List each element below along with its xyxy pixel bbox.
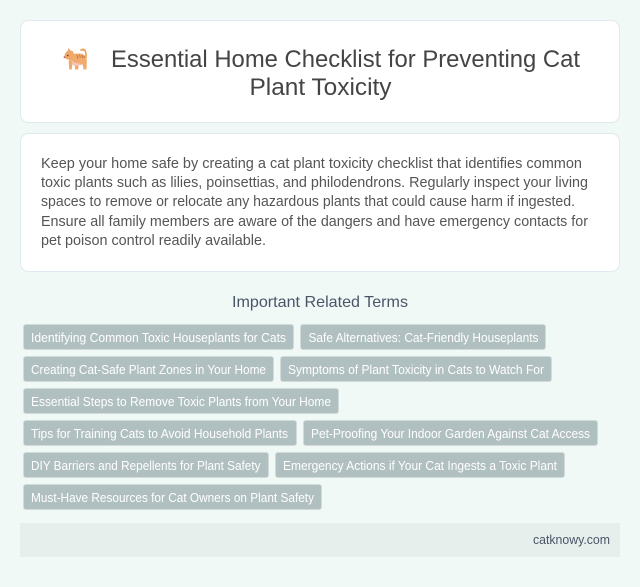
text block: intro paragraph: Ensure all family members are aware of the dangers and have emergency contacts for — [41, 213, 588, 230]
tag: Must-Have Resources for Cat Owners on Plant Safety — [31, 491, 315, 505]
tag: Identifying Common Toxic Houseplants for Cats — [31, 331, 286, 345]
tag — [24, 420, 296, 446]
tag — [24, 324, 294, 350]
tag list: related terms — [24, 324, 598, 510]
text block: intro paragraph: Keep your home safe by creating a cat plant toxicity checklist that identifies common — [41, 155, 582, 172]
tag: Tips for Training Cats to Avoid Household Plants — [31, 427, 288, 441]
text block: intro paragraph: toxic plants such as lilies, poinsettias, and philodendrons. Regularly inspect your living — [41, 174, 588, 191]
title: Essential Home Checklist for Preventing Cat — [111, 46, 580, 73]
footer source text: catknowy.com — [533, 533, 610, 547]
tag — [280, 356, 552, 382]
title — [111, 46, 580, 101]
tag — [276, 452, 564, 478]
tag — [24, 452, 268, 478]
tag — [24, 388, 338, 414]
text block: intro paragraph: pet poison control readily available. — [41, 232, 266, 249]
tag: DIY Barriers and Repellents for Plant Safety — [31, 459, 261, 473]
heading: important related terms: Important Related Terms — [232, 294, 408, 311]
tag: Safe Alternatives: Cat-Friendly Houseplants — [308, 331, 538, 345]
text block: intro paragraph: spaces to remove or relocate any hazardous plants that could cause harm if ingested. — [41, 193, 575, 210]
tag: Pet-Proofing Your Indoor Garden Against Cat Access — [311, 427, 590, 441]
tag: Symptoms of Plant Toxicity in Cats to Watch For — [288, 363, 544, 377]
footer bar — [20, 523, 620, 557]
icon: cat — [64, 48, 87, 70]
tag — [24, 484, 322, 510]
panel: title card — [20, 20, 620, 122]
tag — [24, 356, 274, 382]
panel: intro text card — [20, 134, 620, 272]
tag — [304, 420, 598, 446]
tag: Essential Steps to Remove Toxic Plants from Your Home — [31, 395, 331, 409]
title: Plant Toxicity — [250, 74, 392, 101]
tag: Creating Cat-Safe Plant Zones in Your Home — [31, 363, 266, 377]
tag: Emergency Actions if Your Cat Ingests a Toxic Plant — [283, 459, 557, 473]
tag — [300, 324, 546, 350]
text block: intro paragraph — [41, 155, 588, 249]
